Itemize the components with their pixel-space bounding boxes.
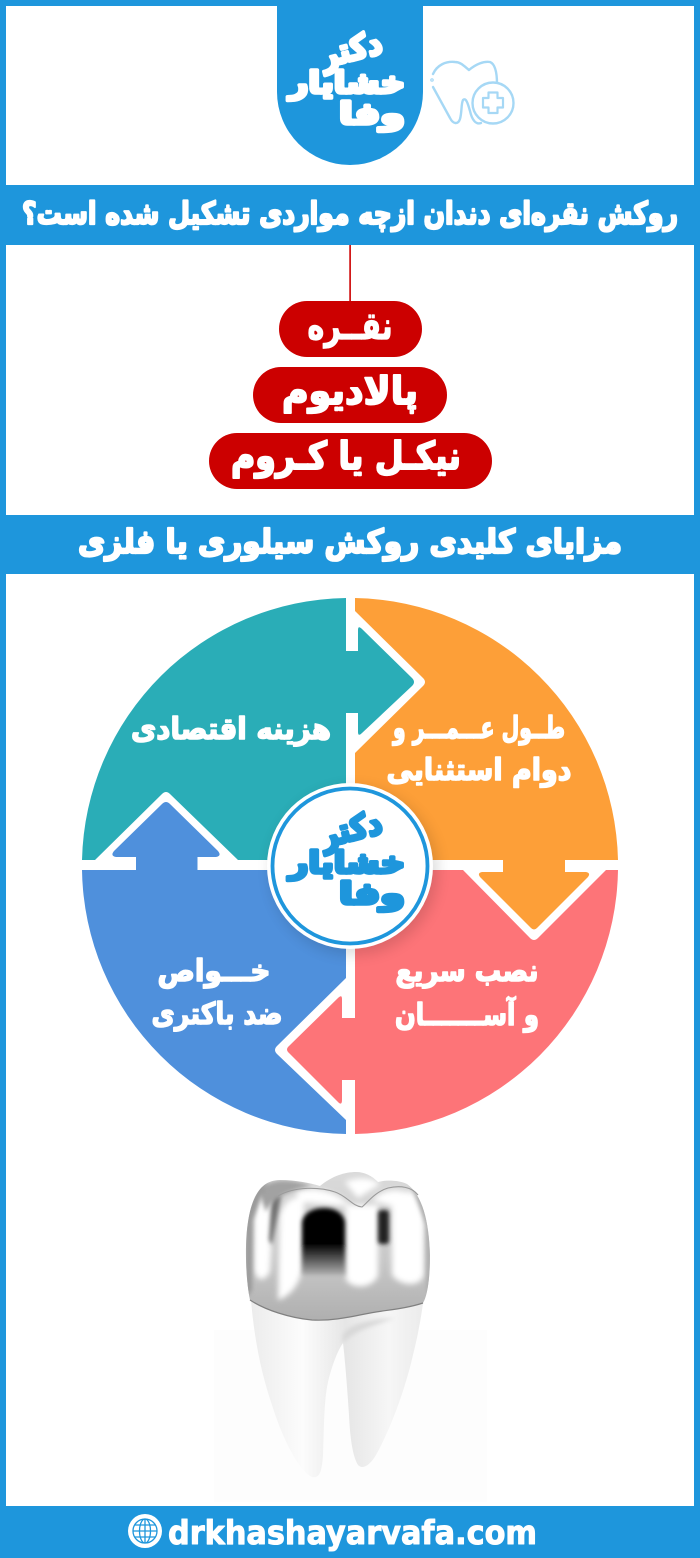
logo wordmark: دکتر xyxy=(315,22,386,77)
segment: economic cost xyxy=(82,598,414,860)
footer website: drkhashayarvafa.com xyxy=(168,1513,537,1552)
segment: antibacterial: خـــواص xyxy=(158,954,270,989)
pill: silver: نقــره xyxy=(308,304,392,348)
tooth with metal crown xyxy=(246,1172,430,1477)
center logo badge: دکتر xyxy=(315,802,386,857)
connector line xyxy=(349,245,351,302)
center logo badge: وفا xyxy=(339,877,405,912)
crown margin line xyxy=(250,1300,423,1320)
chart: benefits wheel xyxy=(82,598,618,1134)
metal crown xyxy=(246,1172,430,1320)
icon: globe xyxy=(128,1514,162,1548)
segment: long lifespan xyxy=(355,598,618,930)
crown highlights xyxy=(254,1178,424,1300)
segment: quick install: و آســـــــان xyxy=(395,996,539,1033)
segment: antibacterial xyxy=(82,802,346,1134)
segment: long lifespan: دوام استثنایی xyxy=(386,753,572,788)
crown dark reflections xyxy=(302,1208,345,1275)
segment: quick install: نصب سریع xyxy=(396,954,538,989)
crown ridge line xyxy=(278,1187,418,1207)
segment: long lifespan: طــول عـــمـــر و xyxy=(392,711,565,746)
center logo badge: خشایار xyxy=(287,846,405,881)
tooth root xyxy=(251,1300,423,1477)
root shading xyxy=(342,1318,395,1343)
heading: key benefits: مزایای کلیدی روکش سیلوری یا فلزی xyxy=(78,522,622,562)
logo wordmark: خشایار xyxy=(287,66,405,101)
pill: palladium xyxy=(253,367,447,423)
pill: nickel or chrome: نیکـل یا کـروم xyxy=(231,434,461,479)
icon: tooth with plus xyxy=(431,62,514,124)
header logo badge xyxy=(277,0,423,165)
pill: silver xyxy=(279,301,422,357)
center logo badge xyxy=(267,783,438,955)
segment: antibacterial: ضد باکتری xyxy=(152,997,282,1032)
logo wordmark: وفا xyxy=(339,97,405,132)
logo wordmark xyxy=(287,22,405,132)
pill: palladium: پالادیوم xyxy=(282,369,418,414)
segment: economic cost: هزینه اقتصادی xyxy=(131,712,331,747)
segment: quick install xyxy=(287,870,618,1134)
